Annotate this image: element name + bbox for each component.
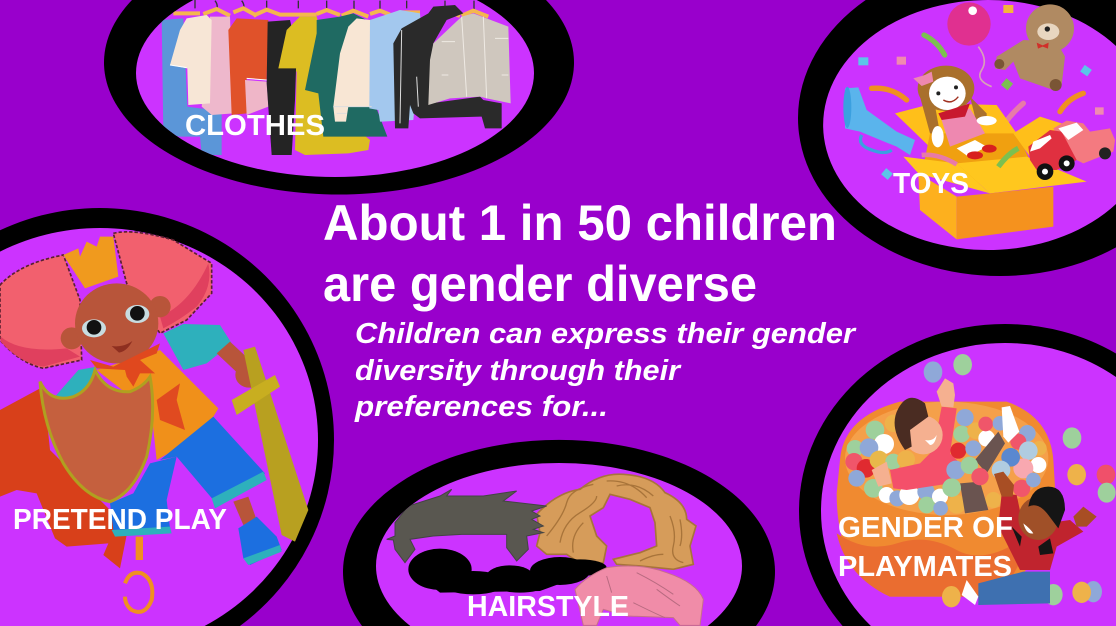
icon: box [895,103,1087,239]
panel: clothes [104,0,574,194]
illustration: toy box [843,2,1115,239]
panel: hairstyle [343,440,775,626]
icon: pink hair [575,566,703,625]
icon: balloon [947,2,992,87]
icon: toy car [1028,121,1115,180]
foreground balls in pit [942,440,1020,497]
icon: pit [837,402,1055,597]
illustration: ball pit [837,354,1116,607]
icon: floor balls [942,581,1102,607]
illustration: hairstyles [387,474,703,625]
icon: teddy bear [994,4,1074,91]
title: About 1 in 50 children [323,195,837,251]
illustration: clothes rack [162,0,511,155]
figure: child in pit [872,378,1019,513]
subtitle: Children can express their gender [355,318,857,350]
panel: pretend play [0,208,334,626]
label: clothes: CLOTHES [185,110,325,142]
figure: cape [0,387,127,568]
label: gender of playmates: GENDER OF [838,512,1013,544]
label: hairstyle: HAIRSTYLE [467,591,629,623]
subtitle: diversity through their [355,355,682,387]
icon: loose balls [924,354,1116,503]
subtitle: preferences for... [354,391,608,423]
title [323,195,837,312]
label: gender of playmates: PLAYMATES [838,551,1012,583]
label: toys: TOYS [893,168,969,200]
icon: black curly hair [408,549,607,594]
figure: sword [232,347,308,542]
figure: head [61,237,171,387]
label: gender of playmates [838,512,1013,583]
subtitle [354,318,857,423]
label: pretend play: PRETEND PLAY [13,504,227,536]
figure: hair [0,232,212,368]
panel: toys [798,0,1116,276]
title: are gender diverse [323,256,757,312]
figure: shirt and sleeves [55,324,263,460]
illustration: child superhero [0,232,308,612]
icon: grey short hair [387,489,547,563]
figure: shorts, leg and shoe [110,417,282,565]
icon: doll [913,66,997,159]
figure: hook [125,537,152,612]
icon: horn [843,87,915,155]
icon: curly blond hair [537,474,696,569]
figure: child sitting [962,472,1097,605]
figure: shield [40,370,153,502]
panel: gender of playmates [799,324,1116,626]
